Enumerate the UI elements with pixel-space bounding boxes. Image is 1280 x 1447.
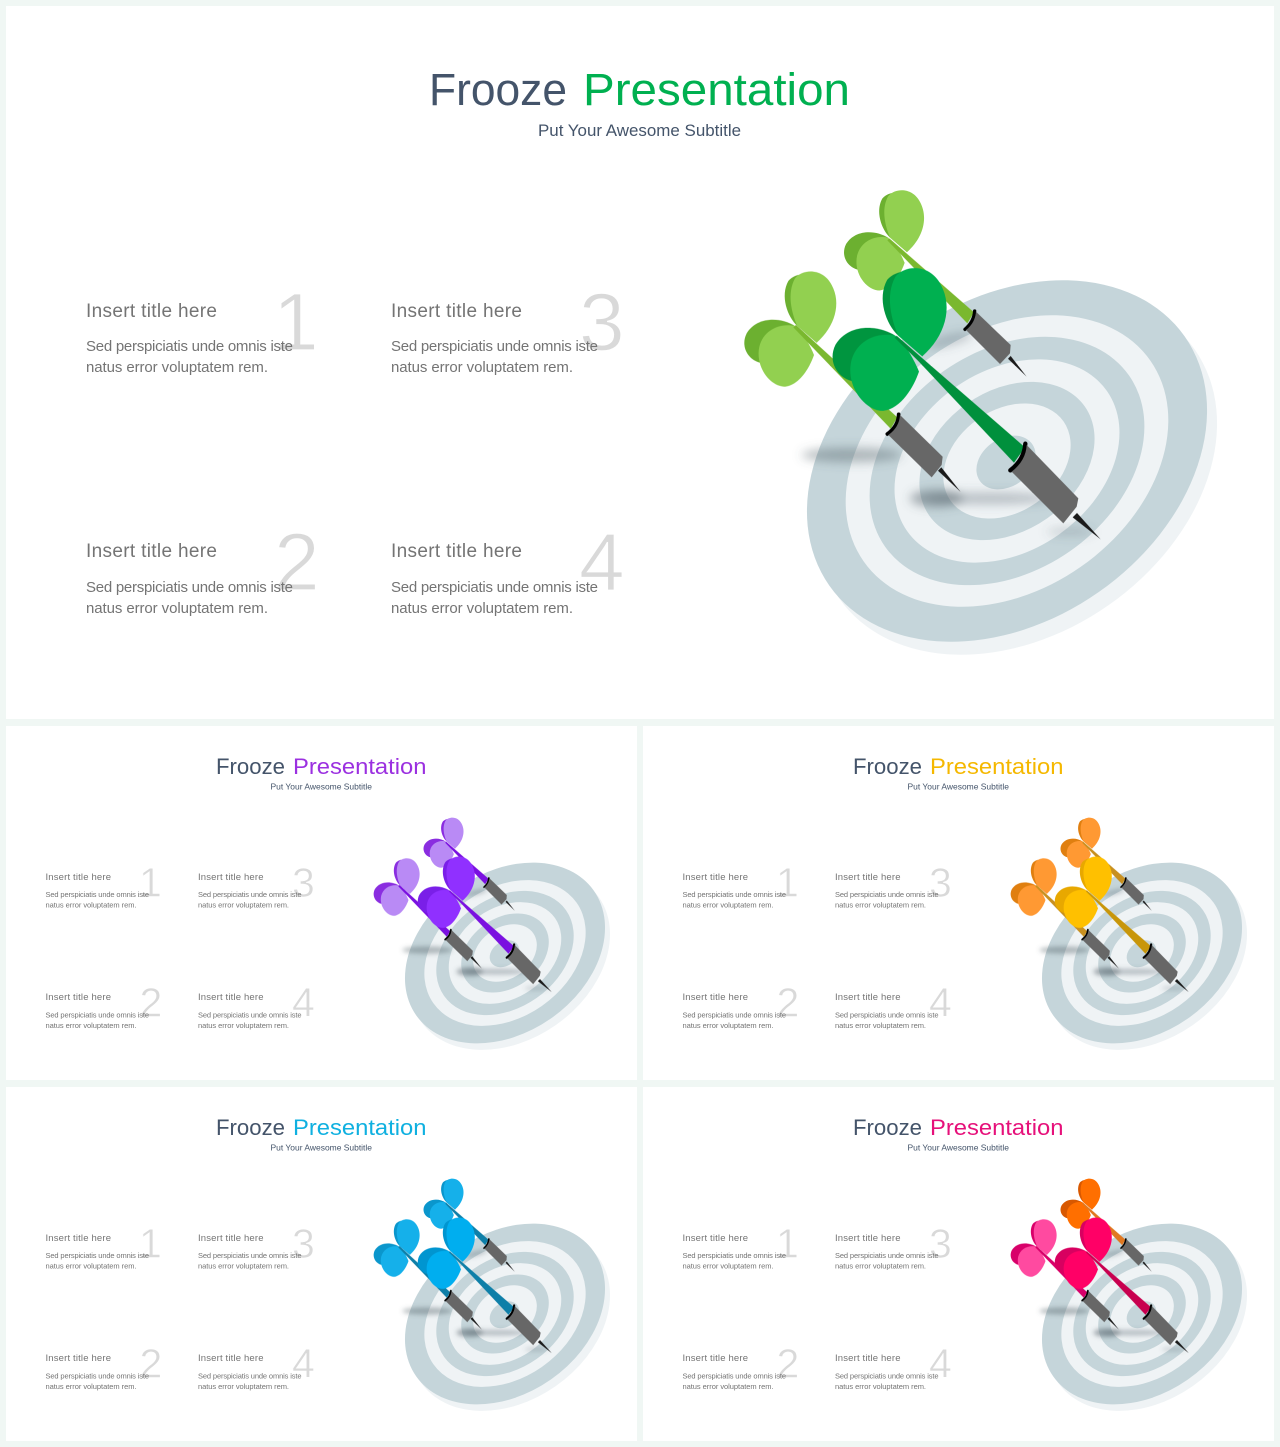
item 3: natus error voluptatem rem. [198,1262,289,1270]
item 3 [391,277,625,376]
item 3: Insert title here [835,1233,900,1244]
item 4: natus error voluptatem rem. [391,600,573,617]
item 1: 1 [139,860,162,906]
title: Presentation [583,64,850,115]
target board [1007,1186,1280,1447]
item 3: 3 [929,1220,952,1266]
dartboard with darts [1007,1179,1280,1447]
item 4: natus error voluptatem rem. [835,1382,926,1391]
slide contents [682,754,1280,1087]
item 1: 1 [776,860,799,906]
item 2: Insert title here [682,1353,748,1364]
item 4 [198,980,315,1030]
item 3: 3 [292,1220,315,1266]
item 4: Sed perspiciatis unde omnis iste [835,1372,938,1380]
item 2: Sed perspiciatis unde omnis iste [86,579,293,596]
slide contents [46,754,645,1087]
item 3: natus error voluptatem rem. [198,900,289,910]
item 2: Insert title here [46,992,111,1003]
subtitle: Put Your Awesome Subtitle [908,1142,1009,1152]
item 4: 4 [929,980,952,1026]
panel: pink slide [643,1087,1280,1447]
item 2: 2 [140,1340,162,1386]
item 3: natus error voluptatem rem. [835,1262,926,1270]
item 2: natus error voluptatem rem. [682,1382,774,1391]
title [429,64,850,115]
item 4: Insert title here [198,1353,264,1364]
dart: left [374,858,482,968]
item 3 [835,1220,952,1270]
target board [737,205,1280,730]
item 4: Insert title here [198,992,264,1003]
item 1: Sed perspiciatis unde omnis iste [46,1251,149,1260]
item 4: natus error voluptatem rem. [835,1021,926,1030]
title [853,1115,1064,1140]
item 1: Insert title here [682,872,748,883]
item 1: Sed perspiciatis unde omnis iste [682,1251,786,1260]
item 3 [198,1220,315,1270]
dart: front [418,857,552,992]
title: Presentation [293,1115,426,1140]
dart: back [424,1179,515,1272]
title [216,754,426,779]
title: Frooze [429,64,567,115]
dart: left [744,272,961,492]
target board [370,825,645,1087]
dart: back [424,818,515,911]
item 3: natus error voluptatem rem. [835,900,926,910]
title: Presentation [930,754,1064,779]
title: Presentation [293,754,426,779]
item 1: natus error voluptatem rem. [46,900,136,910]
item 2: natus error voluptatem rem. [682,1021,774,1030]
item 1: Insert title here [682,1233,748,1244]
item 1: natus error voluptatem rem. [46,1262,136,1270]
title: Frooze [216,754,285,779]
item 2 [682,980,799,1030]
item 2: Sed perspiciatis unde omnis iste [46,1010,149,1020]
item 4: Sed perspiciatis unde omnis iste [391,579,598,596]
item 2: 2 [140,980,162,1026]
item 4: 4 [929,1340,952,1386]
subtitle: Put Your Awesome Subtitle [270,1142,372,1152]
item 3: Insert title here [198,872,264,883]
item 1: 1 [273,277,319,368]
item 3: 3 [292,860,315,906]
dart: left [1011,858,1119,968]
item 2: natus error voluptatem rem. [46,1382,136,1391]
target board [370,1186,645,1447]
item 2 [86,517,320,617]
dart: back [1061,818,1152,911]
dart: front [833,268,1101,539]
item 1: 1 [139,1220,162,1266]
title [853,754,1064,779]
title: Presentation [930,1115,1064,1140]
item 1 [46,1220,162,1270]
item 3: Insert title here [198,1233,264,1244]
dart: back [1061,1179,1152,1272]
dartboard with darts [370,818,645,1087]
item 1: 1 [776,1220,799,1266]
item 4: 4 [292,1340,315,1386]
item 2: Sed perspiciatis unde omnis iste [46,1372,149,1380]
item 1: natus error voluptatem rem. [86,359,268,376]
item 3: Sed perspiciatis unde omnis iste [198,890,302,899]
subtitle: Put Your Awesome Subtitle [538,121,741,140]
item 4: Insert title here [391,541,522,562]
item 1 [682,1220,799,1270]
item 4: natus error voluptatem rem. [198,1021,289,1030]
item 3: natus error voluptatem rem. [391,359,573,376]
item 1: Sed perspiciatis unde omnis iste [682,890,786,899]
item 4: natus error voluptatem rem. [198,1382,289,1391]
subtitle: Put Your Awesome Subtitle [270,782,372,792]
item 1: Sed perspiciatis unde omnis iste [46,890,149,899]
slide contents [682,1115,1280,1447]
item 4: 4 [292,980,315,1026]
dart: front [1055,857,1189,992]
item 4 [835,980,952,1030]
item 4 [198,1340,315,1391]
item 1: Insert title here [86,301,217,322]
item 4 [835,1340,952,1391]
item 2 [682,1340,799,1391]
panel: purple slide [6,726,645,1087]
item 3: Sed perspiciatis unde omnis iste [835,1251,938,1260]
item 3: Sed perspiciatis unde omnis iste [835,890,938,899]
item 2: 2 [274,517,320,608]
item 3 [835,860,952,910]
dart: left [374,1219,482,1329]
item 2 [46,980,162,1030]
item 4: 4 [579,517,625,608]
item 4 [391,517,625,617]
item 3: Sed perspiciatis unde omnis iste [198,1251,302,1260]
title: Frooze [216,1115,285,1140]
item 1: Insert title here [46,872,111,883]
item 3: Insert title here [835,872,900,883]
dart: left [1011,1219,1119,1329]
slide contents [46,1115,645,1447]
title [216,1115,426,1140]
subtitle: Put Your Awesome Subtitle [908,782,1009,792]
dart: front [418,1218,552,1353]
item 1: Sed perspiciatis unde omnis iste [86,338,293,355]
item 1 [46,860,162,910]
dartboard with darts [737,190,1280,730]
dartboard with darts [370,1179,645,1447]
item 2: Sed perspiciatis unde omnis iste [682,1372,786,1380]
panel: yellow slide [643,726,1280,1087]
panel: main green slide [6,6,1280,730]
item 1 [86,277,319,376]
item 2: natus error voluptatem rem. [86,600,268,617]
item 2: natus error voluptatem rem. [46,1021,136,1030]
target board [1007,825,1280,1087]
title: Frooze [853,1115,922,1140]
dartboard with darts [1007,818,1280,1087]
item 2: 2 [776,980,799,1026]
item 2: Insert title here [682,992,748,1003]
item 1 [682,860,799,910]
item 3 [198,860,315,910]
item 4: Sed perspiciatis unde omnis iste [198,1372,302,1380]
item 4: Insert title here [835,992,900,1003]
item 4: Sed perspiciatis unde omnis iste [835,1010,938,1020]
panel: blue slide [6,1087,645,1447]
dart: back [844,190,1027,377]
item 2: Insert title here [46,1353,111,1364]
item 3: Sed perspiciatis unde omnis iste [391,338,598,355]
item 1: Insert title here [46,1233,111,1244]
item 2: 2 [776,1340,799,1386]
item 4: Sed perspiciatis unde omnis iste [198,1010,302,1020]
item 3: Insert title here [391,301,522,322]
item 1: natus error voluptatem rem. [682,900,774,910]
item 2 [46,1340,162,1391]
item 3: 3 [929,860,952,906]
item 4: Insert title here [835,1353,900,1364]
item 2: Sed perspiciatis unde omnis iste [682,1010,786,1020]
item 1: natus error voluptatem rem. [682,1262,774,1270]
title: Frooze [853,754,922,779]
dart: front [1055,1218,1189,1353]
item 3: 3 [579,277,625,368]
item 2: Insert title here [86,541,217,562]
